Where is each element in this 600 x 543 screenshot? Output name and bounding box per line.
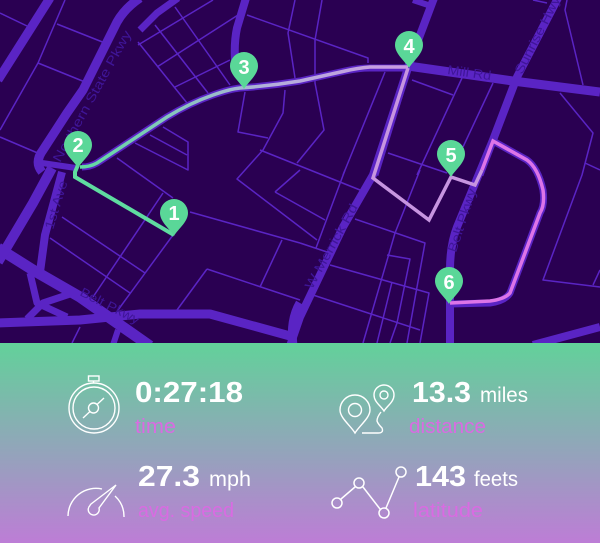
stat: avg. speed	[138, 461, 251, 522]
road labels: Belt Pkwy	[78, 284, 143, 327]
road labels: Belt Pkwy	[445, 186, 479, 254]
stat: time: 0:27:18	[135, 377, 243, 409]
pin 6	[435, 267, 463, 304]
stat: latitude: 143	[415, 461, 466, 493]
road labels: Northern State Pkwy	[50, 27, 135, 164]
stat: distance: miles	[480, 384, 528, 407]
stat: avg. speed: 27.3	[138, 461, 200, 493]
pin 5: 5	[445, 145, 457, 167]
panel: map	[0, 0, 600, 346]
pin 3	[230, 52, 258, 89]
stat: latitude	[413, 461, 518, 522]
pin 3: 3	[238, 57, 250, 79]
pin 4: 4	[403, 36, 415, 58]
minor streets	[0, 0, 600, 343]
road labels: Sunrise Hwy	[511, 0, 564, 76]
icon: stopwatch	[69, 376, 119, 433]
stat: avg. speed: avg. speed	[138, 500, 234, 522]
pin 2: 2	[72, 135, 84, 157]
route: path through waypoints	[75, 67, 544, 304]
icon: elevation line	[332, 467, 406, 518]
pin 1: 1	[168, 203, 180, 225]
panel: stats	[0, 343, 600, 543]
pin 2	[64, 131, 92, 168]
major roads	[0, 0, 600, 346]
pin 6: 6	[443, 272, 455, 294]
stat: time	[135, 377, 243, 438]
pin 4	[395, 31, 423, 68]
stat: distance: distance	[409, 416, 486, 438]
pin 5	[437, 140, 465, 177]
road labels: Mill Rd	[447, 62, 492, 83]
pin 1	[160, 199, 188, 236]
road labels	[42, 0, 564, 327]
icon: map pins with route	[340, 385, 394, 433]
stat: latitude: latitude	[413, 500, 483, 522]
stat: distance: 13.3	[412, 377, 471, 409]
stat: avg. speed: mph	[209, 468, 251, 491]
stat: distance	[409, 377, 528, 438]
road labels: W Merrick Rd	[302, 201, 361, 291]
stat: latitude: feets	[474, 468, 518, 491]
road labels: 1st Ave	[42, 179, 70, 231]
icon: speedometer	[68, 485, 124, 517]
stat: time: time	[135, 416, 176, 438]
